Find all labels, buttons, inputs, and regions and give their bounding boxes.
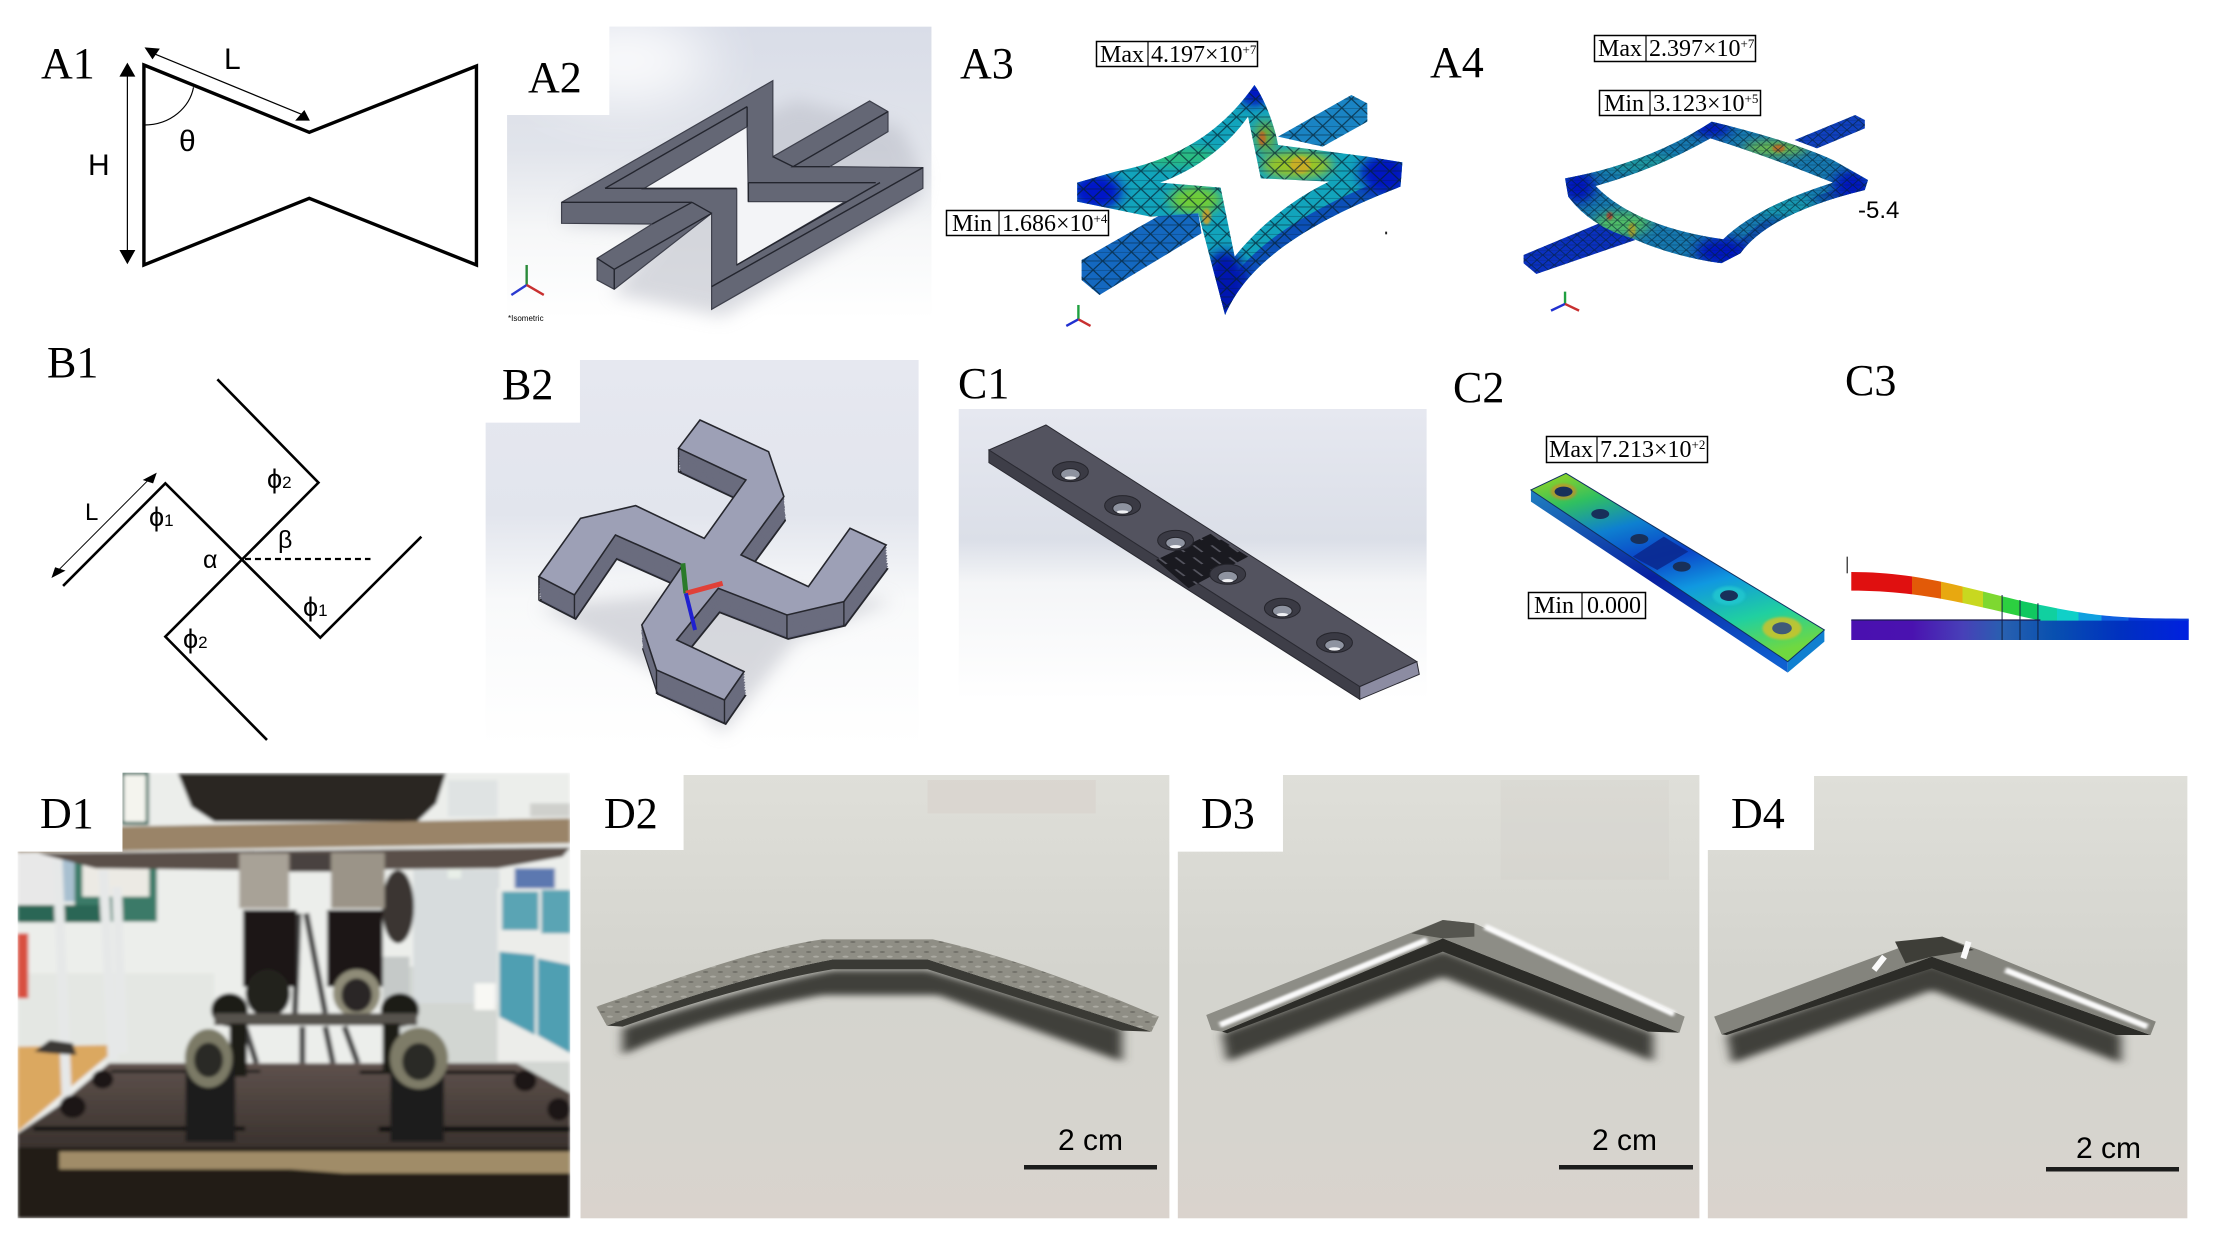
A4 max value box bbox=[1594, 35, 1756, 62]
panel D4: bent specimen photo bbox=[1700, 770, 2187, 1218]
C2 min value box bbox=[1528, 592, 1646, 619]
dimension letters: L bbox=[224, 43, 241, 76]
A4 min value box: Min bbox=[1604, 91, 1644, 117]
panel C3: bending simulation side view bbox=[1845, 356, 2189, 640]
label B2: B2 bbox=[502, 360, 553, 409]
B2 axis triad bbox=[683, 563, 723, 630]
label A3: A3 bbox=[960, 39, 1014, 88]
A4 min value box bbox=[1600, 90, 1760, 117]
panel D1: three-point bending test photo bbox=[8, 765, 582, 1225]
B2 background and model bbox=[478, 353, 919, 747]
D1 photo scene bbox=[8, 765, 582, 1225]
angle and length symbols: ϕ2 bbox=[183, 624, 208, 654]
label A4: A4 bbox=[1430, 38, 1484, 87]
view caption: *Isometric bbox=[508, 314, 544, 323]
D3 scale bar: 2 cm bbox=[1592, 1124, 1657, 1157]
chiral lines with arrow bbox=[51, 379, 421, 740]
C2 min value box: Min bbox=[1534, 593, 1574, 619]
A4 max value box: 2.397×10 bbox=[1649, 36, 1741, 62]
label C3: C3 bbox=[1845, 356, 1896, 405]
A4 mesh model bbox=[1524, 115, 1874, 311]
A2 extruded bowtie bbox=[562, 81, 923, 309]
panel C2: FEA stress of specimen bbox=[1453, 363, 1824, 673]
dimension letters: H bbox=[88, 149, 110, 182]
panel B1: chiral cell diagram bbox=[47, 338, 421, 740]
B2 extruded model bbox=[539, 420, 887, 724]
D2 scale bar: 2 cm bbox=[1058, 1124, 1123, 1157]
label D3: D3 bbox=[1201, 789, 1255, 838]
C1 background and specimen bbox=[959, 409, 1427, 700]
angle and length symbols: β bbox=[278, 526, 292, 554]
panel A2: CAD model of bowtie bbox=[490, 13, 931, 323]
panel D2: bent specimen photo bbox=[570, 770, 1169, 1218]
panel A1: bowtie unit cell diagram bbox=[41, 39, 476, 265]
C2 bolt holes bbox=[1551, 484, 1802, 640]
A3 max value box: 4.197×10 bbox=[1151, 42, 1243, 68]
C2 specimen bbox=[1531, 473, 1824, 673]
A3 min value box: Min bbox=[952, 211, 992, 237]
angle and length symbols: α bbox=[203, 546, 217, 574]
panel D3: bent specimen photo bbox=[1169, 770, 1699, 1218]
D4 scale bar bbox=[2046, 1132, 2179, 1172]
A3 max value box: Max bbox=[1100, 42, 1144, 68]
label A1: A1 bbox=[41, 39, 95, 88]
C2 max value box: 7.213×10 bbox=[1600, 437, 1692, 463]
D3 photo bbox=[1169, 770, 1699, 1218]
label A2: A2 bbox=[528, 53, 582, 102]
A3 min value box: 1.686×10 bbox=[1002, 211, 1094, 237]
label D2: D2 bbox=[604, 789, 658, 838]
panel A3: FEA stress of bowtie bbox=[946, 39, 1412, 326]
panel A4: FEA stress of deformed cell bbox=[1430, 35, 1899, 311]
label C2: C2 bbox=[1453, 363, 1504, 412]
A4 min value box: +5 bbox=[1745, 91, 1758, 106]
C2 min value box: 0.000 bbox=[1587, 593, 1641, 619]
C2 max value box: Max bbox=[1549, 437, 1593, 463]
A3 max value box: +7 bbox=[1243, 42, 1257, 57]
panel B2: CAD model of chiral cell bbox=[478, 353, 919, 747]
A4 axis triad bbox=[1551, 292, 1579, 311]
A3 mesh model bbox=[1066, 80, 1412, 326]
C3 bending contour bbox=[1847, 557, 2189, 640]
dimension letters: θ bbox=[179, 125, 196, 158]
label D1: D1 bbox=[40, 789, 94, 838]
C1 bolt holes bbox=[1052, 462, 1352, 653]
angle and length symbols: L bbox=[85, 499, 98, 526]
angle and length symbols bbox=[85, 464, 328, 654]
A4 max value box: Max bbox=[1598, 36, 1642, 62]
label B1: B1 bbox=[47, 338, 98, 387]
dimension letters bbox=[88, 43, 241, 182]
label C1: C1 bbox=[958, 359, 1009, 408]
A3 min value box bbox=[946, 210, 1108, 237]
A3 axis triad bbox=[1066, 305, 1091, 326]
D2 photo bbox=[570, 770, 1169, 1218]
deformation value: -5.4 bbox=[1858, 197, 1899, 224]
A4 max value box: +7 bbox=[1741, 36, 1755, 51]
A2 background bbox=[490, 13, 931, 319]
panel C1: CAD model of test specimen bbox=[958, 359, 1427, 700]
angle and length symbols: ϕ2 bbox=[267, 464, 292, 494]
A3 min value box: +4 bbox=[1094, 211, 1108, 226]
C2 max value box: +2 bbox=[1692, 437, 1705, 452]
D4 scale bar: 2 cm bbox=[2076, 1132, 2141, 1165]
A3 max value box bbox=[1096, 41, 1258, 68]
bowtie outline with dimension arrows bbox=[119, 47, 476, 265]
D2 scale bar bbox=[1024, 1124, 1157, 1170]
D4 photo bbox=[1700, 770, 2187, 1218]
D3 scale bar bbox=[1559, 1124, 1693, 1170]
label D4: D4 bbox=[1731, 789, 1785, 838]
angle and length symbols: ϕ1 bbox=[303, 592, 328, 622]
C2 max value box bbox=[1546, 436, 1708, 463]
A2 axis triad bbox=[511, 265, 544, 295]
angle and length symbols: ϕ1 bbox=[149, 502, 174, 532]
A4 min value box: 3.123×10 bbox=[1653, 91, 1745, 117]
